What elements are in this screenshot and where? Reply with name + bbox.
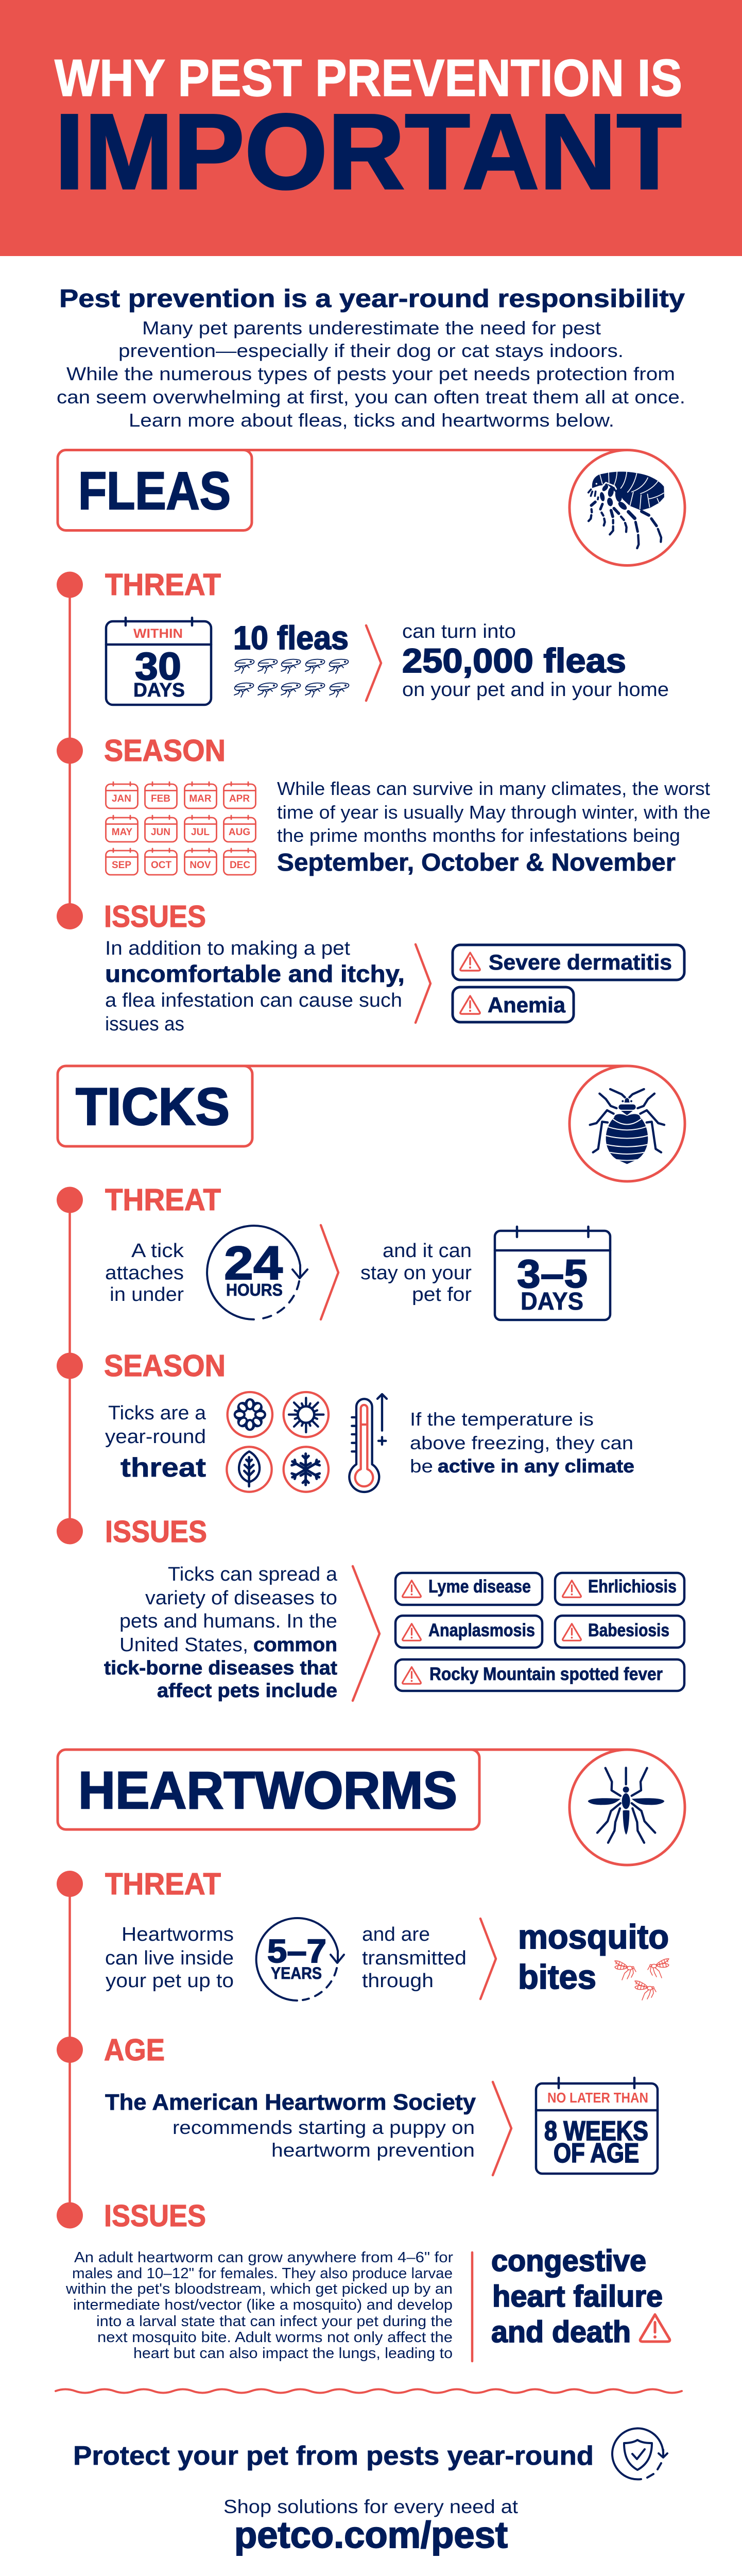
issue: anemia: Anemia bbox=[488, 993, 566, 1017]
lifespan text bbox=[105, 1924, 234, 1992]
arrow: chevron bbox=[353, 1566, 379, 1701]
icon: 24 hours clock: 24 bbox=[224, 1237, 283, 1290]
issue: rocky mountain spotted fever: Rocky Mountain spotted fever bbox=[429, 1664, 663, 1684]
calendar: within 30 days: DAYS bbox=[133, 680, 185, 701]
tick stay text: stay on your bbox=[360, 1262, 472, 1284]
section: fleas bbox=[57, 450, 711, 1035]
icon: 5-7 years clock bbox=[256, 1918, 344, 2001]
growth callout: can turn into bbox=[402, 621, 516, 642]
month calendars grid: AUG bbox=[229, 827, 250, 838]
tick attach text: attaches bbox=[105, 1262, 184, 1284]
arrow: chevron bbox=[416, 944, 430, 1023]
shop text: Shop solutions for every need at bbox=[223, 2496, 519, 2517]
issues heading: ISSUES bbox=[105, 1515, 207, 1549]
tick diseases text bbox=[104, 1564, 338, 1702]
issue: ehrlichiosis: Ehrlichiosis bbox=[588, 1577, 677, 1597]
tick diseases text: Ticks can spread a bbox=[168, 1564, 338, 1585]
month calendars grid: APR bbox=[229, 793, 250, 804]
calendar: 8 weeks of age: NO LATER THAN bbox=[547, 2090, 648, 2106]
threat heading: THREAT bbox=[105, 568, 221, 602]
fleas title box: FLEAS bbox=[78, 461, 231, 520]
month calendars grid bbox=[106, 782, 255, 875]
issues text: In addition to making a pet bbox=[105, 938, 350, 959]
calendar: 3-5 days: DAYS bbox=[521, 1288, 583, 1315]
month calendars grid: OCT bbox=[151, 860, 171, 871]
issues text: a flea infestation can cause such bbox=[105, 990, 402, 1011]
mosquito bites callout: bites bbox=[518, 1958, 596, 1996]
lifespan text: Heartworms bbox=[122, 1924, 234, 1945]
icon: 5-7 years clock: YEARS bbox=[271, 1964, 322, 1982]
ticks title box bbox=[58, 1066, 627, 1146]
icons: ten small fleas bbox=[234, 659, 349, 697]
issue: anaplasmosis bbox=[395, 1616, 542, 1648]
section: heartworms bbox=[57, 1750, 685, 2362]
icon: sun bbox=[284, 1392, 329, 1437]
tick attach text: in under bbox=[110, 1284, 184, 1306]
heartworm paragraph bbox=[65, 2249, 453, 2362]
tick stay text: pet for bbox=[412, 1284, 472, 1306]
calendar: 8 weeks of age bbox=[536, 2078, 658, 2174]
tick diseases text: United States, bbox=[119, 1634, 248, 1656]
climate text: be bbox=[410, 1455, 433, 1477]
issue: lyme disease: Lyme disease bbox=[428, 1577, 531, 1597]
issue: rocky mountain spotted fever bbox=[395, 1659, 684, 1691]
timeline bbox=[57, 572, 83, 929]
month calendars grid: JUL bbox=[191, 827, 210, 838]
icon: warning bbox=[640, 2314, 670, 2342]
transmission text: through bbox=[362, 1970, 434, 1992]
ticks season text: year-round bbox=[105, 1426, 206, 1448]
season text bbox=[277, 778, 711, 876]
call to action bbox=[73, 2428, 667, 2556]
age recommendation text: recommends starting a puppy on bbox=[172, 2117, 475, 2138]
tick diseases text: variety of diseases to bbox=[145, 1587, 337, 1609]
heartworm paragraph: heart but can also impact the lungs, leading to bbox=[133, 2345, 453, 2362]
month calendars grid: FEB bbox=[151, 793, 170, 804]
intro paragraph: prevention—especially if their dog or cat stays indoors. bbox=[118, 340, 624, 361]
season text: While fleas can survive in many climates, the worst bbox=[277, 778, 710, 799]
heart failure callout: heart failure bbox=[492, 2280, 663, 2313]
heart failure callout: and death bbox=[491, 2315, 631, 2349]
month calendars grid: NOV bbox=[189, 860, 211, 871]
age heading: AGE bbox=[104, 2033, 165, 2067]
tick attach text bbox=[105, 1240, 184, 1306]
lifespan text: your pet up to bbox=[106, 1970, 234, 1992]
heartworm paragraph: within the pet's bloodstream, which get picked up by an bbox=[65, 2281, 453, 2297]
intro heading: Pest prevention is a year-round responsibility bbox=[59, 285, 685, 313]
ten fleas count: 10 fleas bbox=[233, 619, 349, 656]
intro paragraph: can seem overwhelming at first, you can often treat them all at once. bbox=[57, 386, 685, 408]
issues text bbox=[105, 938, 405, 1035]
tick diseases text: pets and humans. In the bbox=[119, 1611, 337, 1632]
season heading: SEASON bbox=[104, 1349, 226, 1383]
issue: severe dermatitis bbox=[453, 945, 684, 980]
icon: mosquito bbox=[570, 1750, 685, 1865]
calendar: 3-5 days: 3–5 bbox=[517, 1252, 588, 1296]
timeline bbox=[57, 1187, 83, 1545]
icon: tick bbox=[570, 1066, 685, 1181]
icon: leaf bbox=[227, 1447, 272, 1492]
calendar: within 30 days: WITHIN bbox=[133, 626, 183, 641]
icon: 5-7 years clock: 5–7 bbox=[267, 1933, 326, 1970]
issues heading: ISSUES bbox=[104, 900, 206, 934]
issue: anemia bbox=[453, 987, 574, 1022]
intro paragraph: Learn more about fleas, ticks and heartworms below. bbox=[129, 410, 614, 431]
icon: thermometer bbox=[349, 1394, 387, 1492]
mosquito bites callout: mosquito bbox=[518, 1918, 669, 1956]
heartworm paragraph: males and 10–12" for females. They also produce larvae bbox=[72, 2265, 453, 2282]
fleas title box bbox=[58, 450, 627, 531]
ticks season text bbox=[105, 1402, 206, 1483]
icon: snowflake bbox=[284, 1447, 329, 1492]
calendar: within 30 days: 30 bbox=[135, 645, 181, 688]
heart failure callout: congestive bbox=[491, 2244, 646, 2278]
heartworm paragraph: intermediate host/vector (like a mosquito) and develop bbox=[73, 2297, 453, 2313]
season text: time of year is usually May through winter, with the bbox=[277, 802, 711, 823]
intro block bbox=[57, 285, 685, 431]
issue: anaplasmosis: Anaplasmosis bbox=[428, 1620, 535, 1640]
icon: 24 hours clock bbox=[207, 1226, 307, 1319]
arrow: chevron bbox=[366, 625, 381, 701]
icons: small mosquitoes bbox=[615, 1959, 669, 2000]
growth callout: 250,000 fleas bbox=[402, 641, 626, 680]
heart failure callout bbox=[491, 2244, 670, 2349]
growth callout: on your pet and in your home bbox=[402, 679, 669, 701]
intro paragraph: Many pet parents underestimate the need for pest bbox=[142, 317, 601, 338]
heartworm paragraph: next mosquito bite. Adult worms not only affect the bbox=[97, 2329, 453, 2346]
month calendars grid: MAY bbox=[112, 827, 133, 838]
month calendars grid: JAN bbox=[112, 793, 131, 804]
tick diseases text: tick-borne diseases that bbox=[104, 1657, 337, 1679]
icon: flea bbox=[570, 450, 685, 566]
season text: September, October & November bbox=[277, 849, 676, 876]
tick diseases text: affect pets include bbox=[157, 1680, 337, 1702]
calendar: 8 weeks of age: 8 WEEKS bbox=[544, 2116, 648, 2146]
threat heading: THREAT bbox=[105, 1183, 221, 1217]
title line 2: IMPORTANT bbox=[55, 92, 682, 212]
climate text: If the temperature is bbox=[410, 1409, 594, 1430]
intro paragraph: While the numerous types of pests your pet needs protection from bbox=[66, 363, 675, 384]
arrow: chevron bbox=[480, 1919, 496, 1999]
tick attach text: A tick bbox=[131, 1240, 184, 1262]
month calendars grid: JUN bbox=[151, 827, 170, 838]
calendar: 8 weeks of age: OF AGE bbox=[554, 2138, 639, 2168]
tick diseases text: common bbox=[253, 1634, 337, 1656]
section: ticks bbox=[57, 1066, 685, 1702]
tick stay text bbox=[360, 1240, 472, 1306]
issue: babesiosis: Babesiosis bbox=[588, 1620, 669, 1640]
lifespan text: can live inside bbox=[105, 1947, 234, 1969]
header banner bbox=[0, 0, 742, 256]
climate text bbox=[410, 1409, 634, 1477]
transmission text: transmitted bbox=[362, 1947, 467, 1969]
title line 1: WHY PEST PREVENTION IS bbox=[55, 49, 682, 107]
heartworm paragraph: An adult heartworm can grow anywhere from 4–6" for bbox=[74, 2249, 453, 2266]
divider bar bbox=[471, 2252, 473, 2361]
issue: ehrlichiosis bbox=[555, 1573, 684, 1605]
mosquito bites callout bbox=[518, 1918, 669, 2000]
climate text: active in any climate bbox=[438, 1455, 634, 1477]
arrow: chevron bbox=[493, 2082, 511, 2175]
calendar: 3-5 days bbox=[495, 1227, 610, 1320]
calendar: within 30 days bbox=[106, 618, 211, 705]
threat heading: THREAT bbox=[105, 1867, 221, 1901]
heartworm paragraph: into a larval state that can infect your pet during the bbox=[96, 2313, 453, 2330]
age recommendation text: The American Heartworm Society bbox=[105, 2090, 476, 2115]
icon: 24 hours clock: HOURS bbox=[226, 1280, 283, 1299]
issue: lyme disease bbox=[395, 1573, 542, 1605]
issue: babesiosis bbox=[555, 1616, 684, 1648]
issues text: uncomfortable and itchy, bbox=[105, 960, 405, 987]
transmission text: and are bbox=[362, 1924, 430, 1945]
growth callout bbox=[402, 621, 669, 701]
intro paragraph bbox=[57, 317, 685, 431]
protect heading: Protect your pet from pests year-round bbox=[73, 2441, 594, 2471]
icon: shield with cycle bbox=[612, 2428, 667, 2479]
heartworms title box bbox=[58, 1750, 627, 1829]
icon: flower bbox=[228, 1392, 272, 1437]
icons: four seasons bbox=[227, 1392, 329, 1492]
age recommendation text bbox=[105, 2090, 476, 2161]
season heading: SEASON bbox=[104, 734, 226, 768]
issues heading: ISSUES bbox=[104, 2199, 206, 2233]
url: petco.com/pest bbox=[234, 2515, 508, 2556]
climate text: above freezing, they can bbox=[410, 1432, 633, 1453]
tick stay text: and it can bbox=[383, 1240, 472, 1262]
month calendars grid: SEP bbox=[112, 860, 131, 871]
month calendars grid: MAR bbox=[189, 793, 212, 804]
arrow: chevron bbox=[321, 1225, 338, 1319]
ticks season text: threat bbox=[120, 1453, 206, 1483]
age recommendation text: heartworm prevention bbox=[271, 2140, 475, 2161]
ten fleas count bbox=[233, 619, 349, 697]
ticks title box: TICKS bbox=[76, 1077, 230, 1136]
issue: severe dermatitis: Severe dermatitis bbox=[489, 950, 672, 974]
transmission text bbox=[362, 1924, 467, 1992]
issues text: issues as bbox=[105, 1013, 184, 1035]
timeline bbox=[57, 1871, 83, 2229]
season text: the prime months months for infestations being bbox=[277, 825, 680, 846]
heartworms title box: HEARTWORMS bbox=[78, 1761, 457, 1820]
ticks season text: Ticks are a bbox=[108, 1402, 206, 1424]
month calendars grid: DEC bbox=[230, 860, 250, 871]
